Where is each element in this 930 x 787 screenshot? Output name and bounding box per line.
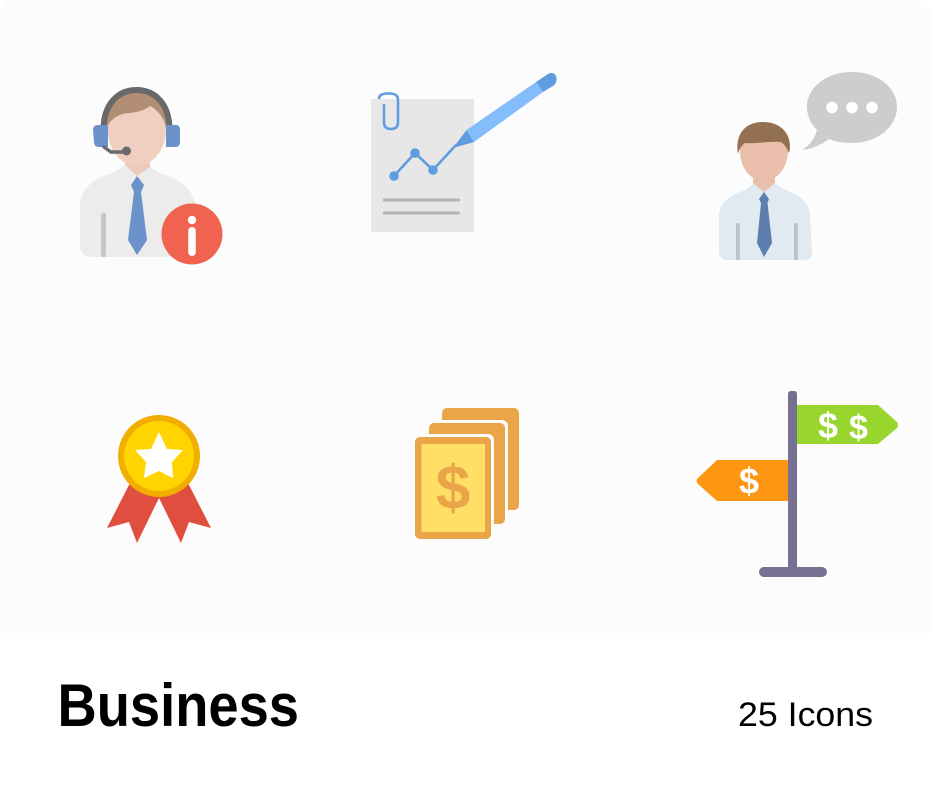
speech bubble bbox=[802, 72, 897, 150]
icon: businessman with speech bubble bbox=[719, 72, 897, 260]
icon: support agent with info badge bbox=[80, 90, 222, 264]
icon: stack of dollar bills bbox=[412, 408, 519, 542]
orange sign: $ bbox=[739, 460, 759, 502]
green sign: $ bbox=[849, 409, 868, 447]
businessman bbox=[719, 122, 812, 260]
icon: award ribbon medal bbox=[107, 415, 211, 543]
orange sign bbox=[696, 460, 788, 502]
green sign bbox=[797, 405, 898, 447]
title: Business bbox=[58, 672, 299, 739]
dollar sign: $ bbox=[436, 454, 470, 523]
post bbox=[788, 391, 797, 568]
icon: dollar signpost bbox=[696, 391, 898, 577]
icon: signed chart document bbox=[371, 73, 557, 232]
icon count: 25 Icons bbox=[738, 696, 873, 734]
green sign: $ bbox=[818, 405, 838, 446]
